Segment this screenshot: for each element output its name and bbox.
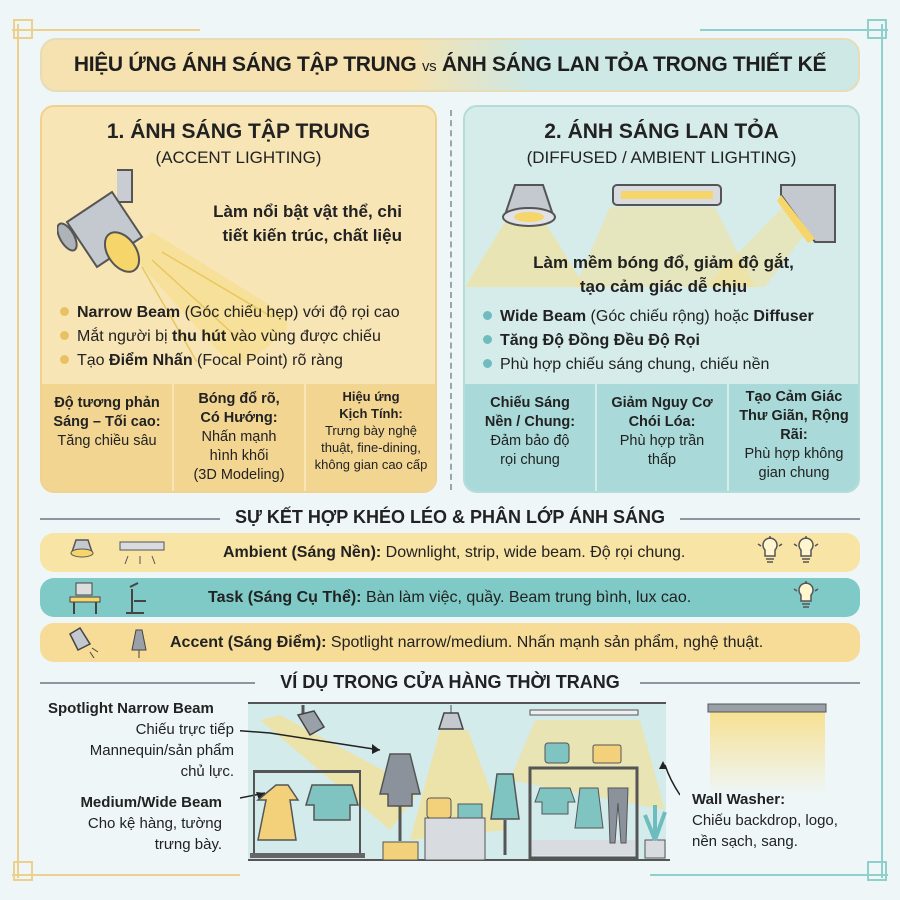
heading: accent: 1. ÁNH SÁNG TẬP TRUNG	[107, 120, 370, 143]
icon: bulb	[794, 581, 818, 608]
bullets: accent	[60, 304, 400, 369]
callout: wall washer: Wall Washer:	[692, 791, 785, 808]
feature row: diffused: Chói Lóa:	[629, 414, 695, 430]
callout: spotlight narrow beam: Spotlight Narrow Beam	[48, 700, 214, 717]
panel: accent lighting: Narrow Beam (Góc chiếu hẹp) với độ rọi cao	[77, 304, 400, 321]
callout: medium/wide beam: Medium/Wide Beam	[80, 794, 222, 811]
feature row: diffused: rọi chung	[500, 452, 560, 468]
icon: spotlight	[57, 169, 287, 362]
callout: spotlight narrow beam	[48, 700, 234, 780]
feature row: diffused	[465, 384, 862, 495]
heading: diffused: 2. ÁNH SÁNG LAN TỎA	[544, 120, 779, 143]
feature row: diffused: Thư Giãn, Rộng	[739, 408, 849, 424]
text: diffused purpose: Làm mềm bóng đổ, giảm độ gắt,	[533, 253, 794, 272]
title bar: HIỆU ỨNG ÁNH SÁNG TẬP TRUNG vs ÁNH SÁNG LAN TỎA TRONG THIẾT KẾ	[74, 53, 826, 76]
feature row: accent: Kịch Tính:	[339, 406, 403, 421]
callout: spotlight narrow beam: Chiếu trực tiếp	[136, 721, 234, 738]
callout: spotlight narrow beam: chủ lực.	[181, 763, 234, 780]
feature row: diffused: Đảm bảo độ	[490, 433, 570, 449]
illustration: store scene	[240, 702, 680, 861]
bar: ambient: Ambient (Sáng Nền): Downlight, strip, wide beam. Độ rọi chung.	[223, 544, 685, 561]
feature row: diffused: Rãi:	[780, 427, 808, 443]
bar: task	[40, 578, 860, 617]
panel: accent lighting: Tạo Điểm Nhấn (Focal Point) rõ ràng	[77, 352, 343, 369]
feature row: accent: Độ tương phản Sáng – Tối cao:	[53, 395, 161, 430]
callout: medium/wide beam: trưng bày.	[155, 836, 222, 853]
text: accent purpose: Làm nổi bật vật thể, chi tiết kiến trúc, chất liệu	[213, 202, 402, 245]
callout: wall washer: Chiếu backdrop, logo,	[692, 812, 838, 829]
feature row: diffused: Phù hợp không	[744, 446, 844, 462]
feature row: diffused: gian chung	[759, 465, 829, 481]
feature row: accent: thuật, fine-dining,	[321, 440, 421, 455]
divider	[450, 110, 452, 490]
feature row: diffused: Giảm Nguy Cơ	[611, 395, 713, 411]
feature row: accent: Bóng đổ rõ, Có Hướng:	[198, 391, 280, 426]
icons: spotlight & pendant	[69, 627, 147, 658]
feature row: accent: Trưng bày nghệ	[325, 423, 417, 438]
callout: wall washer: nền sạch, sang.	[692, 833, 798, 850]
bar: task: Task (Sáng Cụ Thể): Bàn làm việc, quầy. Beam trung bình, lux cao.	[208, 589, 691, 606]
feature row: diffused: Chiếu Sáng	[490, 395, 570, 411]
feature row: diffused: Nền / Chung:	[485, 414, 575, 430]
section heading: layering: SỰ KẾT HỢP KHÉO LÉO & PHÂN LỚP ÁNH SÁNG	[235, 507, 665, 527]
panel: diffused lighting: Wide Beam (Góc chiếu rộng) hoặc Diffuser	[500, 308, 814, 325]
text: diffused purpose	[533, 253, 794, 296]
feature row: accent: không gian cao cấp	[315, 457, 427, 472]
panel: diffused lighting: Tăng Độ Đồng Đều Độ Rọi	[500, 332, 700, 349]
panel: accent lighting	[40, 105, 437, 493]
feature row: accent	[42, 384, 439, 495]
bar: ambient	[40, 533, 860, 572]
section heading: example: VÍ DỤ TRONG CỬA HÀNG THỜI TRANG	[280, 672, 620, 692]
feature row: accent: Hiệu ứng	[342, 389, 400, 404]
icons: downlight & strip	[70, 539, 164, 564]
panel: accent lighting: Mắt người bị thu hút vào vùng được chiếu	[77, 328, 381, 345]
subheading: accent: (ACCENT LIGHTING)	[156, 148, 321, 167]
feature row: diffused: Phù hợp trần	[620, 433, 704, 449]
title bar	[40, 38, 860, 92]
icons: desk & lamp	[70, 582, 146, 614]
feature row: diffused: thấp	[648, 452, 676, 468]
callout: medium/wide beam: Cho kệ hàng, tường	[88, 815, 222, 832]
icons: bulbs	[758, 536, 818, 563]
feature row: accent: Nhấn mạnh hình khối	[202, 429, 276, 464]
icons: diffused fixtures	[465, 184, 836, 287]
callout: wall washer	[692, 791, 838, 850]
feature row: diffused: Tạo Cảm Giác	[746, 389, 842, 405]
bar: accent: Accent (Sáng Điểm): Spotlight narrow/medium. Nhấn mạnh sản phẩm, nghệ thuật.	[170, 634, 763, 651]
callout: spotlight narrow beam: Mannequin/sản phẩm	[90, 742, 234, 759]
subheading: diffused: (DIFFUSED / AMBIENT LIGHTING)	[527, 148, 796, 167]
text: diffused purpose: tạo cảm giác dễ chịu	[580, 277, 747, 296]
feature row: accent: (3D Modeling)	[193, 467, 285, 483]
panel: diffused lighting	[463, 105, 860, 493]
feature row: accent: Tăng chiều sâu	[57, 433, 157, 449]
fixture: wall washer	[708, 704, 826, 788]
panel: diffused lighting: Phù hợp chiếu sáng chung, chiếu nền	[500, 356, 769, 373]
bullets: diffused	[483, 308, 814, 373]
callout: medium/wide beam	[80, 794, 222, 853]
bar: accent	[40, 623, 860, 662]
